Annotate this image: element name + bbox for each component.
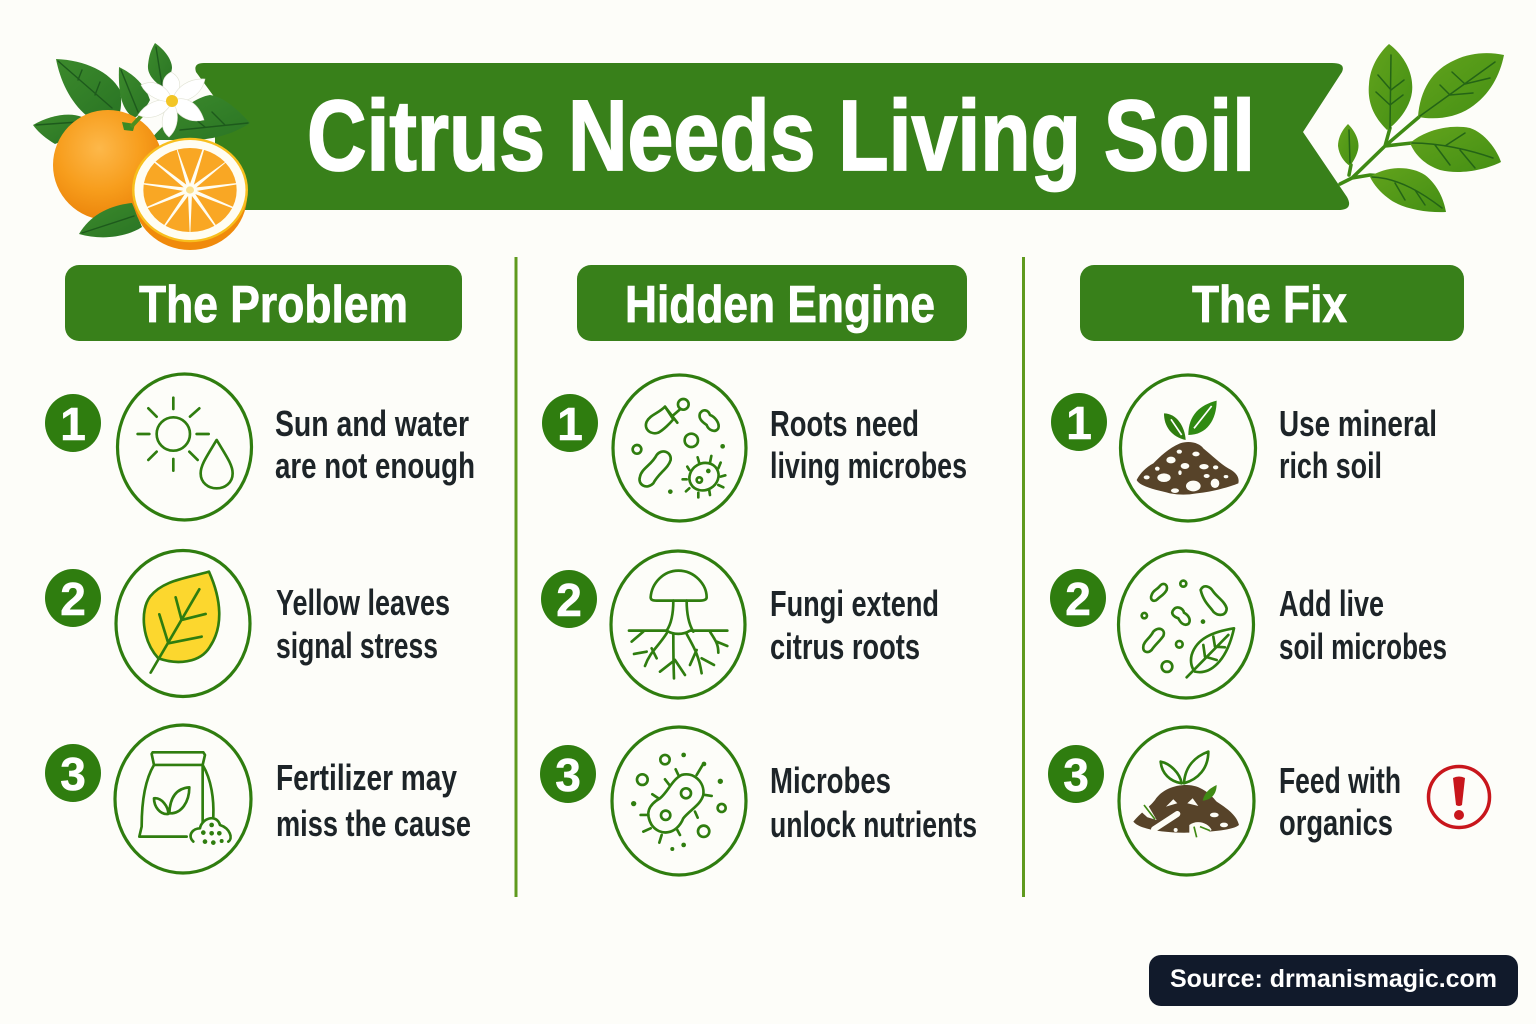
number badge 2	[541, 570, 597, 628]
text: feed organics: organics	[1279, 802, 1393, 843]
number badge 3: 3	[60, 748, 86, 800]
citrus leaves	[33, 43, 250, 144]
orange slice	[132, 138, 248, 250]
text: fungi: citrus roots	[770, 626, 920, 667]
icon: soil microbes and leaf	[1118, 551, 1254, 698]
icon: living microbes	[613, 375, 746, 521]
bottom leaf	[79, 203, 142, 237]
icon: organic compost pile	[1119, 727, 1254, 875]
number badge 3	[45, 744, 101, 802]
text: yellow leaves: signal stress	[276, 625, 438, 666]
leaf sprig	[1338, 44, 1504, 212]
text: feed organics	[1279, 760, 1401, 843]
source badge: Source: drmanismagic.com	[1170, 965, 1497, 993]
title banner	[195, 63, 1349, 210]
text: mineral soil	[1279, 403, 1437, 486]
source badge	[1149, 955, 1518, 1006]
column dividers	[514, 257, 1025, 897]
text: sun and water: Sun and water	[275, 403, 469, 444]
text: live microbes: soil microbes	[1279, 626, 1447, 667]
number badge 1: 1	[1066, 397, 1092, 449]
text: sun and water	[275, 403, 475, 486]
heading: the fix	[1080, 265, 1464, 341]
icon: mineral soil with sprout	[1120, 375, 1256, 521]
number badge 1: 1	[60, 398, 86, 450]
text: fertilizer: miss the cause	[276, 803, 471, 844]
panel: hidden engine	[540, 265, 977, 875]
icon: sun and water drop	[118, 374, 252, 520]
text: fertilizer: Fertilizer may	[276, 757, 457, 798]
icon: fungi and roots	[611, 551, 745, 698]
text: live microbes: Add live	[1279, 583, 1384, 624]
number badge 2: 2	[1065, 573, 1091, 625]
citrus illustration	[33, 43, 250, 250]
text: fungi	[770, 583, 939, 667]
number badge 1	[542, 394, 598, 452]
text: roots need: Roots need	[770, 403, 919, 444]
text: yellow leaves	[276, 582, 450, 666]
number badge 3	[540, 745, 596, 803]
icon: fertilizer bag	[115, 725, 251, 873]
heading: the problem	[65, 265, 462, 341]
number badge 3: 3	[555, 749, 581, 801]
orange blossom	[138, 72, 205, 137]
icon: microbe unlocking nutrients	[612, 727, 746, 875]
icon: red alert	[1428, 766, 1490, 828]
heading: the problem: The Problem	[139, 276, 408, 334]
text: yellow leaves: Yellow leaves	[276, 582, 450, 623]
text: sun and water: are not enough	[275, 445, 475, 486]
icon: yellow leaf	[116, 550, 250, 696]
panel: the problem	[45, 265, 475, 873]
text: mineral soil: Use mineral	[1279, 403, 1437, 444]
text: mineral soil: rich soil	[1279, 445, 1382, 486]
number badge 1	[45, 394, 101, 452]
text: live microbes	[1279, 583, 1447, 667]
text: microbes: unlock nutrients	[770, 804, 977, 845]
number badge 3: 3	[1063, 749, 1089, 801]
heading: the fix: The Fix	[1192, 276, 1347, 334]
heading: hidden engine: Hidden Engine	[625, 276, 935, 334]
number badge 1: 1	[557, 398, 583, 450]
number badge 2: 2	[556, 574, 582, 626]
text: feed organics: Feed with	[1279, 760, 1401, 801]
whole orange	[53, 110, 163, 220]
number badge 3	[1048, 745, 1104, 803]
text: fertilizer	[276, 757, 471, 844]
text: microbes	[770, 760, 977, 845]
title text: Citrus Needs Living Soil	[307, 80, 1255, 192]
text: fungi: Fungi extend	[770, 583, 939, 624]
panel: the fix	[1048, 265, 1490, 875]
text: microbes: Microbes	[770, 760, 891, 801]
number badge 1	[1051, 393, 1107, 451]
text: roots need	[770, 403, 967, 486]
number badge 2: 2	[60, 573, 86, 625]
number badge 2	[45, 569, 101, 627]
number badge 2	[1050, 569, 1106, 627]
text: roots need: living microbes	[770, 445, 967, 486]
heading: hidden engine	[577, 265, 967, 341]
